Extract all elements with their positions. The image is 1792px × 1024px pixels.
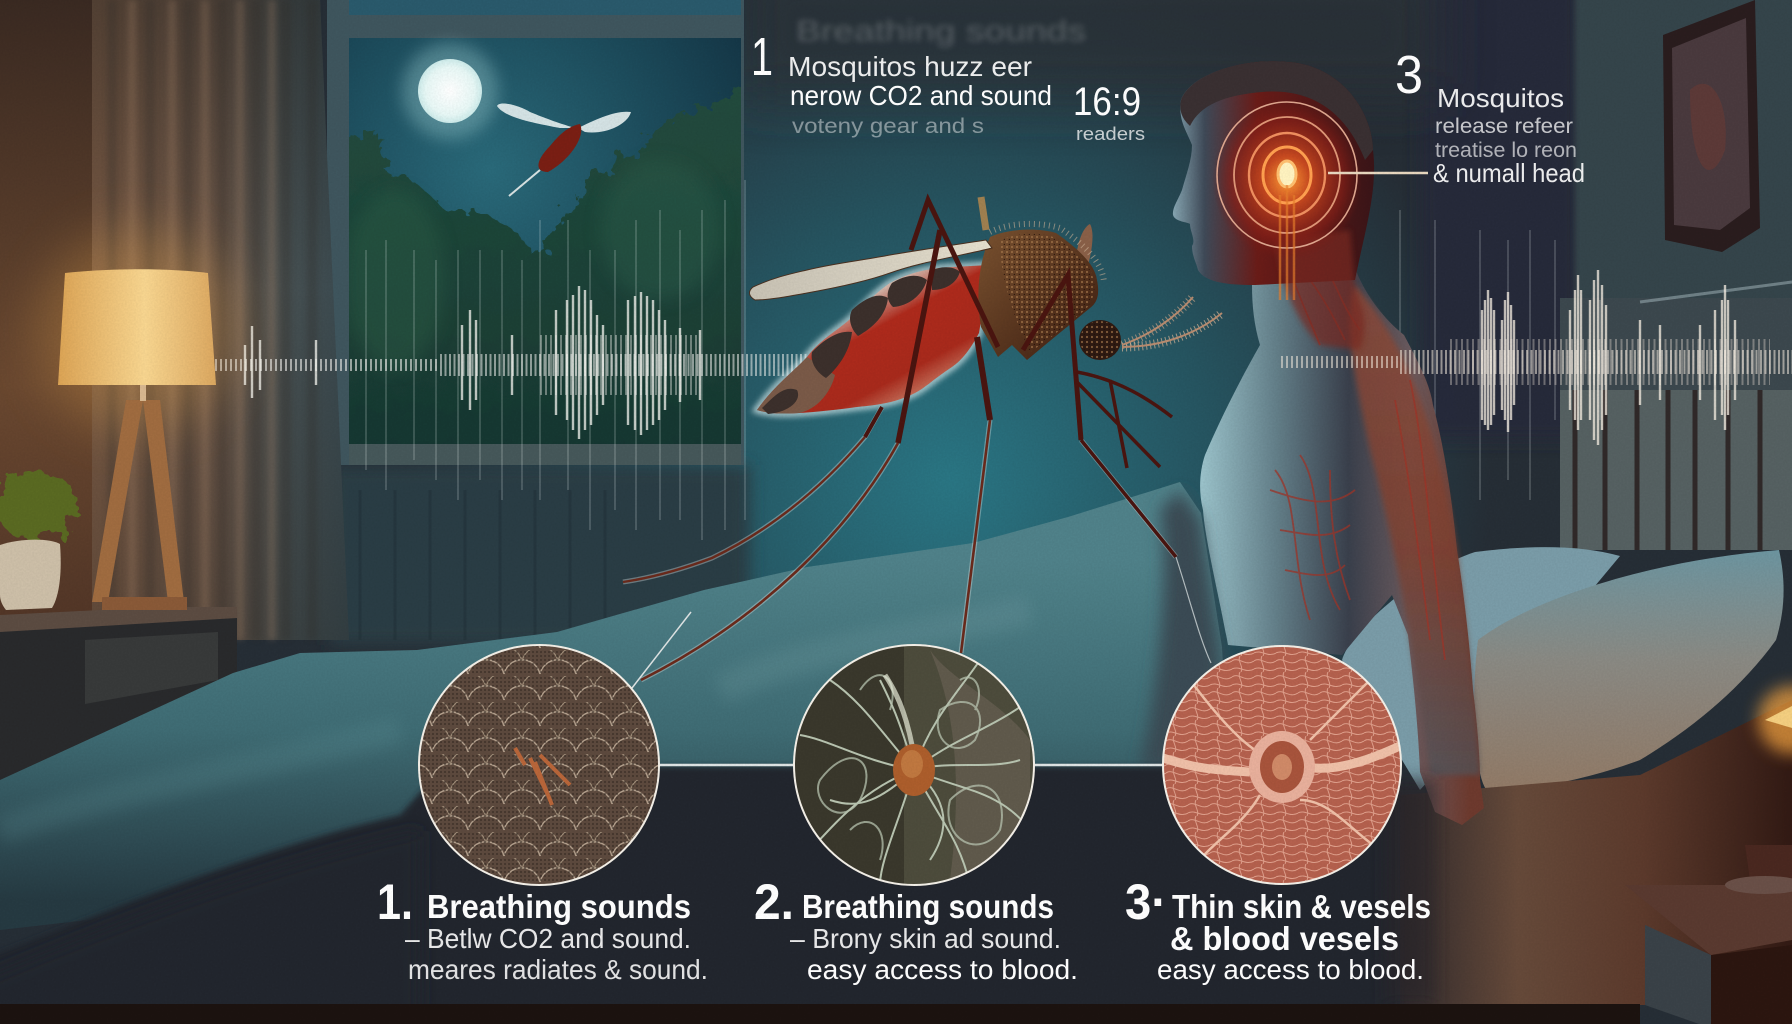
top callout 3 text: 3	[1395, 45, 1423, 105]
label 1 bottom: breathing sounds	[377, 874, 708, 985]
label 3 bottom: thin skin and vessels: easy access to blood.	[1157, 954, 1424, 985]
pale halo around the body	[757, 265, 990, 414]
moon	[402, 43, 498, 139]
waveform faint vertical lines	[366, 180, 1600, 540]
small flying mosquito	[497, 104, 631, 196]
top ratio label: 16:9	[1073, 80, 1141, 124]
hair	[1180, 61, 1373, 160]
label 2 bottom: breathing sounds: Breathing sounds	[802, 888, 1054, 925]
glowing rings in head	[1212, 100, 1362, 300]
nightstand	[0, 607, 237, 790]
top callout 1 text: voteny gear and s	[792, 115, 984, 138]
window with night sky	[327, 0, 744, 465]
dark bed front panel	[0, 766, 1435, 1024]
left wall	[0, 0, 100, 700]
top callout 1 text: Mosquitos huzz eer	[788, 51, 1032, 82]
curtains	[92, 0, 349, 640]
abdomen	[757, 265, 990, 414]
thorax fuzz	[990, 224, 1104, 282]
wooden floor strip	[0, 1004, 1640, 1024]
label 3 bottom: thin skin and vessels: Thin skin & vesels	[1172, 888, 1431, 925]
main mosquito	[623, 197, 1222, 680]
legs	[623, 407, 1176, 680]
callout line from head	[1328, 172, 1428, 174]
label 1 bottom: breathing sounds: 1.	[377, 874, 413, 930]
red neck	[1275, 230, 1365, 350]
label 3 bottom: thin skin and vessels: 3·	[1125, 874, 1167, 930]
abdomen tip and pale lower edge	[757, 357, 835, 414]
label 3 bottom: thin skin and vessels: & blood vesels	[1170, 920, 1399, 957]
top callout 1 text: nerow CO2 and sound	[790, 80, 1052, 111]
label 1 bottom: breathing sounds: – Betlw CO2 and sound.	[405, 923, 691, 954]
top callout 3 text: Mosquitos	[1437, 83, 1564, 113]
bite point with hair	[515, 748, 570, 805]
waveform left	[60, 286, 860, 439]
circle 1: skin texture	[419, 645, 659, 885]
bedside lamp	[37, 230, 237, 610]
mouth parts	[1077, 372, 1172, 468]
torso and arm	[1200, 268, 1484, 825]
top callout 1 text	[751, 27, 1052, 138]
wing	[749, 240, 992, 300]
human figure	[1173, 61, 1484, 825]
connector lines between circles	[632, 612, 1163, 765]
mattress	[1400, 700, 1792, 1005]
label 1 bottom: breathing sounds: meares radiates & sound.	[408, 954, 708, 985]
top callout 3 text: treatise lo reon	[1435, 139, 1577, 162]
faded top heading: Breathing sounds	[796, 15, 1086, 48]
feathered antennae	[1122, 297, 1222, 347]
label 2 bottom: breathing sounds: – Brony skin ad sound.	[790, 923, 1061, 954]
bedside table and cup	[1625, 686, 1792, 1024]
headboard slats and wall panel	[1560, 282, 1792, 550]
label 1 bottom: breathing sounds: Breathing sounds	[427, 888, 691, 925]
red arm shading	[1350, 285, 1480, 775]
waveform right	[1281, 270, 1792, 445]
framed picture on wall	[1663, 0, 1760, 252]
top callout 3 text	[1395, 45, 1585, 188]
top callout 1 text: 1	[751, 27, 773, 87]
top callout 3 text: & numall head	[1433, 158, 1585, 188]
potted plant	[0, 471, 78, 610]
pillows	[1342, 547, 1784, 792]
blanket	[0, 482, 1230, 930]
top ratio label: readers	[1076, 124, 1145, 144]
head	[1173, 61, 1374, 285]
label 2 bottom: breathing sounds: 2.	[754, 874, 794, 930]
top callout 3 text: release refeer	[1435, 115, 1573, 138]
circle 2: nerve fibres	[794, 645, 1034, 885]
top ratio label	[1073, 80, 1145, 144]
thorax	[978, 230, 1098, 360]
circle 3: blood vessels	[1163, 646, 1402, 884]
label 2 bottom: breathing sounds	[754, 874, 1078, 985]
label 2 bottom: breathing sounds: easy access to blood.	[807, 954, 1078, 985]
head of mosquito	[1079, 320, 1121, 360]
red vessels on the body	[1270, 270, 1445, 660]
trees outside the window	[349, 86, 741, 444]
abdomen dark bands	[762, 267, 960, 414]
label 3 bottom: thin skin and vessels	[1125, 874, 1431, 985]
